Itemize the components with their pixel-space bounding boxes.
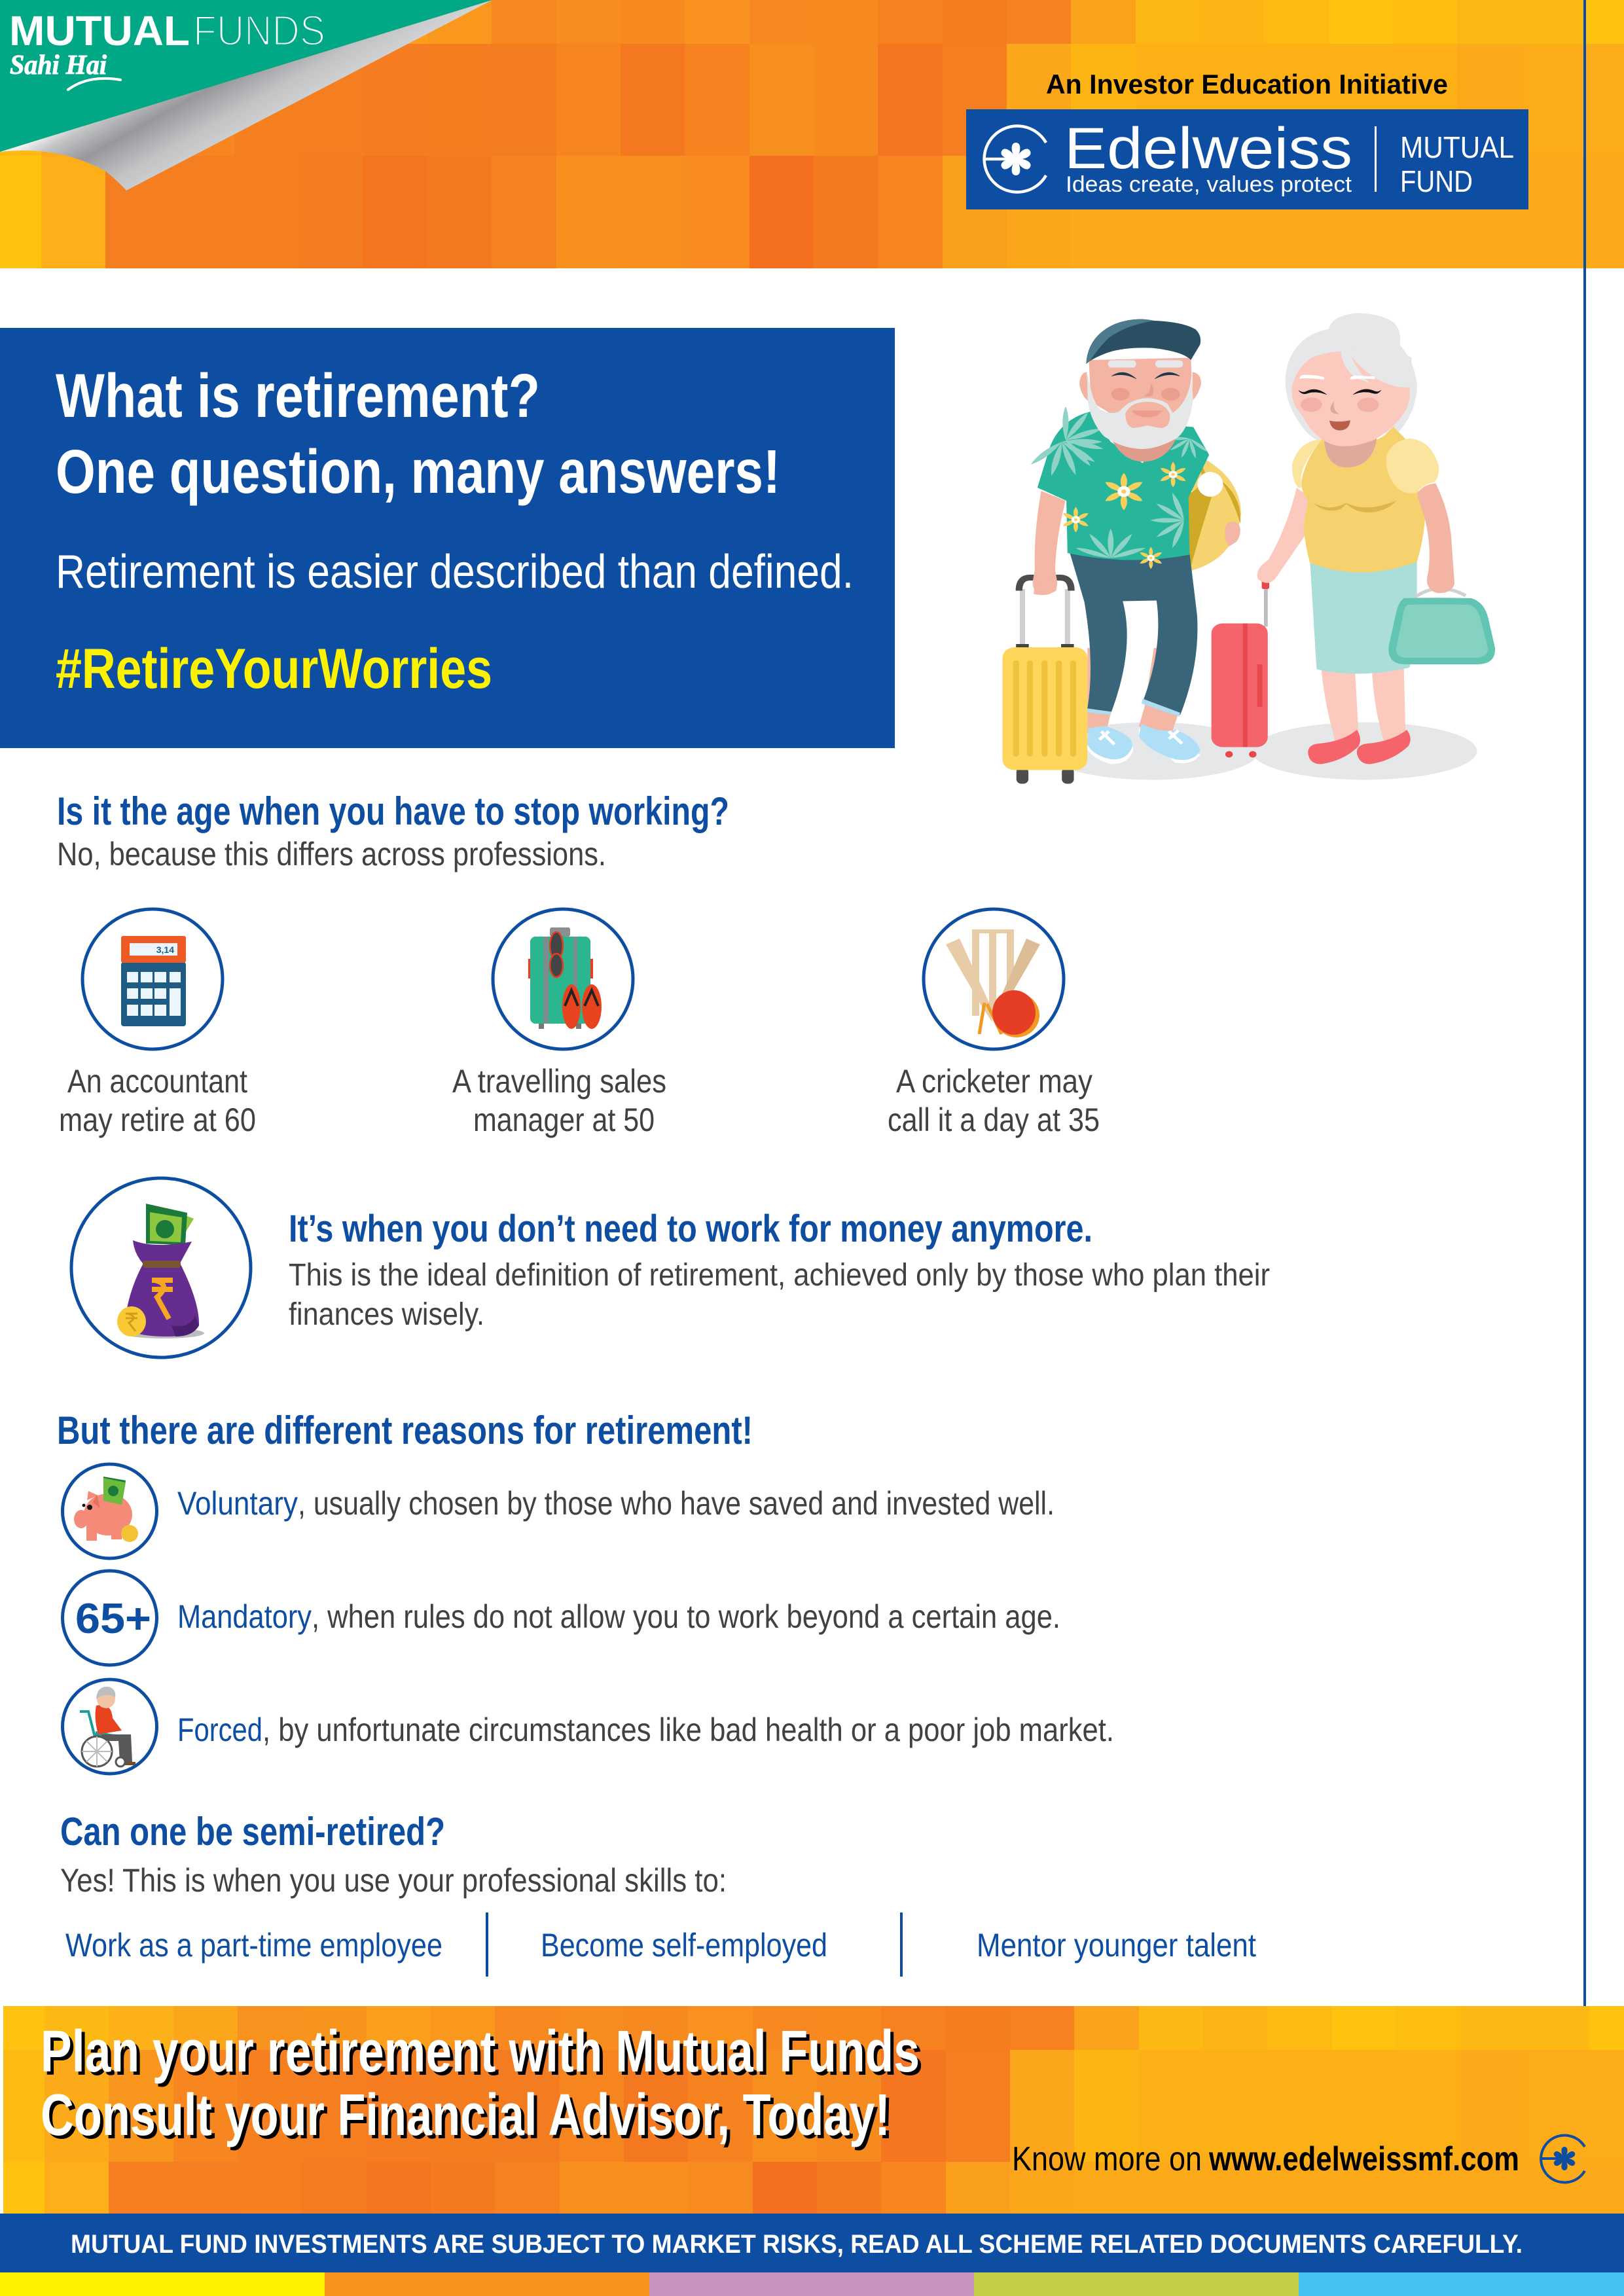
text: mandatory: Mandatory — [177, 1598, 312, 1635]
Edelweiss wordmark: Edelweiss — [1064, 115, 1352, 181]
woman right arm and handbag — [1388, 483, 1495, 664]
call to action: Consult your Financial Advisor, Today! — [41, 2083, 890, 2148]
Edelweiss Mutual Fund logo — [966, 109, 1528, 209]
page curl — [0, 0, 492, 190]
call to action: Plan your retirement with Mutual Funds — [41, 2019, 920, 2085]
call to action — [41, 2019, 923, 2151]
label: travelling sales manager: A travelling sales — [452, 1063, 666, 1100]
text: voluntary: , usually chosen by those who have saved and invested well. — [298, 1485, 1055, 1522]
title — [56, 361, 780, 507]
woman legs, skirt and left arm — [1257, 488, 1417, 764]
header background mosaic — [0, 0, 1624, 268]
call to action: Plan your retirement with Mutual Funds — [44, 2022, 923, 2088]
Mutual Fund text: MUTUAL — [1400, 130, 1514, 164]
hair — [1285, 313, 1417, 440]
man body — [1024, 398, 1241, 764]
icon: calculator — [82, 909, 223, 1049]
tropical shirt — [1024, 398, 1212, 569]
label: cricketer: call it a day at 35 — [888, 1102, 1100, 1138]
yellow suitcase — [1003, 577, 1087, 784]
icon: 65+ — [63, 1571, 157, 1665]
handbag — [1388, 588, 1495, 664]
Mutual Fund text: FUND — [1400, 164, 1473, 198]
option: self-employed: Become self-employed — [541, 1927, 827, 1964]
logo divider — [1375, 126, 1377, 192]
icon: cricket stumps, bats and ball — [924, 909, 1064, 1049]
panel: title — [0, 328, 895, 748]
option: part-time: Work as a part-time employee — [65, 1927, 442, 1964]
Sahi Hai tagline: Sahi Hai — [10, 50, 107, 81]
icon: person in wheelchair — [63, 1679, 157, 1774]
Mutual Funds wordmark: FUNDS — [193, 7, 325, 54]
footer background mosaic — [3, 2006, 1624, 2214]
bottom colour strip — [0, 2272, 1624, 2296]
label: accountant: may retire at 60 — [59, 1102, 256, 1138]
teal corner — [0, 0, 492, 152]
heading: stop working: Is it the age when you have to stop working? — [57, 789, 729, 833]
ground shadows — [1045, 723, 1477, 780]
label: accountant — [59, 1063, 256, 1138]
illustration: retired couple with luggage — [1003, 313, 1495, 784]
website link: www.edelweissmf.com — [1208, 2140, 1519, 2178]
call to action: Consult your Financial Advisor, Today! — [44, 2086, 893, 2151]
website link: Know more on — [1012, 2140, 1202, 2178]
disclaimer bar — [0, 2214, 1624, 2272]
label: cricketer — [888, 1063, 1100, 1138]
label: travelling sales manager — [452, 1063, 666, 1138]
page corner with teal Mutual Funds Sahi Hai logo — [0, 0, 492, 190]
label: cricketer: A cricketer may — [896, 1063, 1092, 1100]
icon: 65+: 65+ — [75, 1594, 151, 1642]
icon: Edelweiss emblem on the line — [1541, 2136, 1585, 2182]
heading: ideal definition: It’s when you don’t need to work for money anymore. — [289, 1208, 1092, 1250]
text: mandatory: , when rules do not allow you to work beyond a certain age. — [312, 1598, 1060, 1635]
logo emblem — [984, 126, 1046, 192]
icon: suitcase, sunglasses and flip-flops — [493, 909, 633, 1049]
label: accountant: An accountant — [67, 1063, 247, 1100]
text: forced: Forced — [177, 1712, 262, 1748]
icon: calculator: 3,14 — [156, 944, 174, 955]
text: differs across professions: No, because this differs across professions. — [57, 836, 606, 872]
woman head and blouse — [1285, 313, 1439, 573]
label: travelling sales manager: manager at 50 — [473, 1102, 655, 1138]
title: One question, many answers! — [56, 437, 780, 507]
text: voluntary: Voluntary — [177, 1485, 298, 1522]
hashtag: #RetireYourWorries — [56, 637, 492, 700]
man head — [1079, 319, 1201, 461]
Mutual Funds wordmark: MUTUAL — [9, 7, 190, 54]
investor education heading: An Investor Education Initiative — [1046, 69, 1448, 99]
red suitcase — [1212, 571, 1269, 758]
title: What is retirement? — [56, 361, 540, 431]
heading: reasons for retirement: But there are different reasons for retirement! — [57, 1408, 753, 1452]
logo tagline: Ideas create, values protect — [1066, 172, 1352, 197]
Mutual Funds wordmark — [9, 7, 325, 54]
text: forced: , by unfortunate circumstances like bad health or a poor job market. — [262, 1712, 1114, 1748]
website link — [1012, 2140, 1519, 2178]
text: ideal definition: This is the ideal definition of retirement, achieved only by those who plan their — [289, 1258, 1270, 1293]
blouse — [1301, 427, 1425, 573]
beach ball — [1187, 453, 1241, 571]
text: ideal definition — [289, 1258, 1270, 1332]
right vertical blue line — [1583, 0, 1586, 2214]
icon: money bag — [71, 1178, 251, 1357]
subtitle: Retirement is easier described than defined. — [56, 546, 854, 598]
flat cap — [1086, 319, 1200, 364]
icon: piggy bank — [63, 1464, 157, 1558]
text: professional skills: Yes! This is when you use your professional skills to: — [60, 1862, 727, 1899]
text: ideal definition: finances wisely. — [289, 1297, 484, 1332]
couple lower layers — [1003, 398, 1477, 784]
disclaimer bar: MUTUAL FUND INVESTMENTS ARE SUBJECT TO MARKET RISKS, READ ALL SCHEME RELATED DOCUMENTS CAREFULLY. — [71, 2230, 1523, 2259]
face — [1291, 351, 1410, 446]
heading: semi-retired: Can one be semi-retired? — [60, 1810, 445, 1854]
Mutual Fund text — [1400, 130, 1514, 198]
option: mentor: Mentor younger talent — [977, 1927, 1256, 1964]
